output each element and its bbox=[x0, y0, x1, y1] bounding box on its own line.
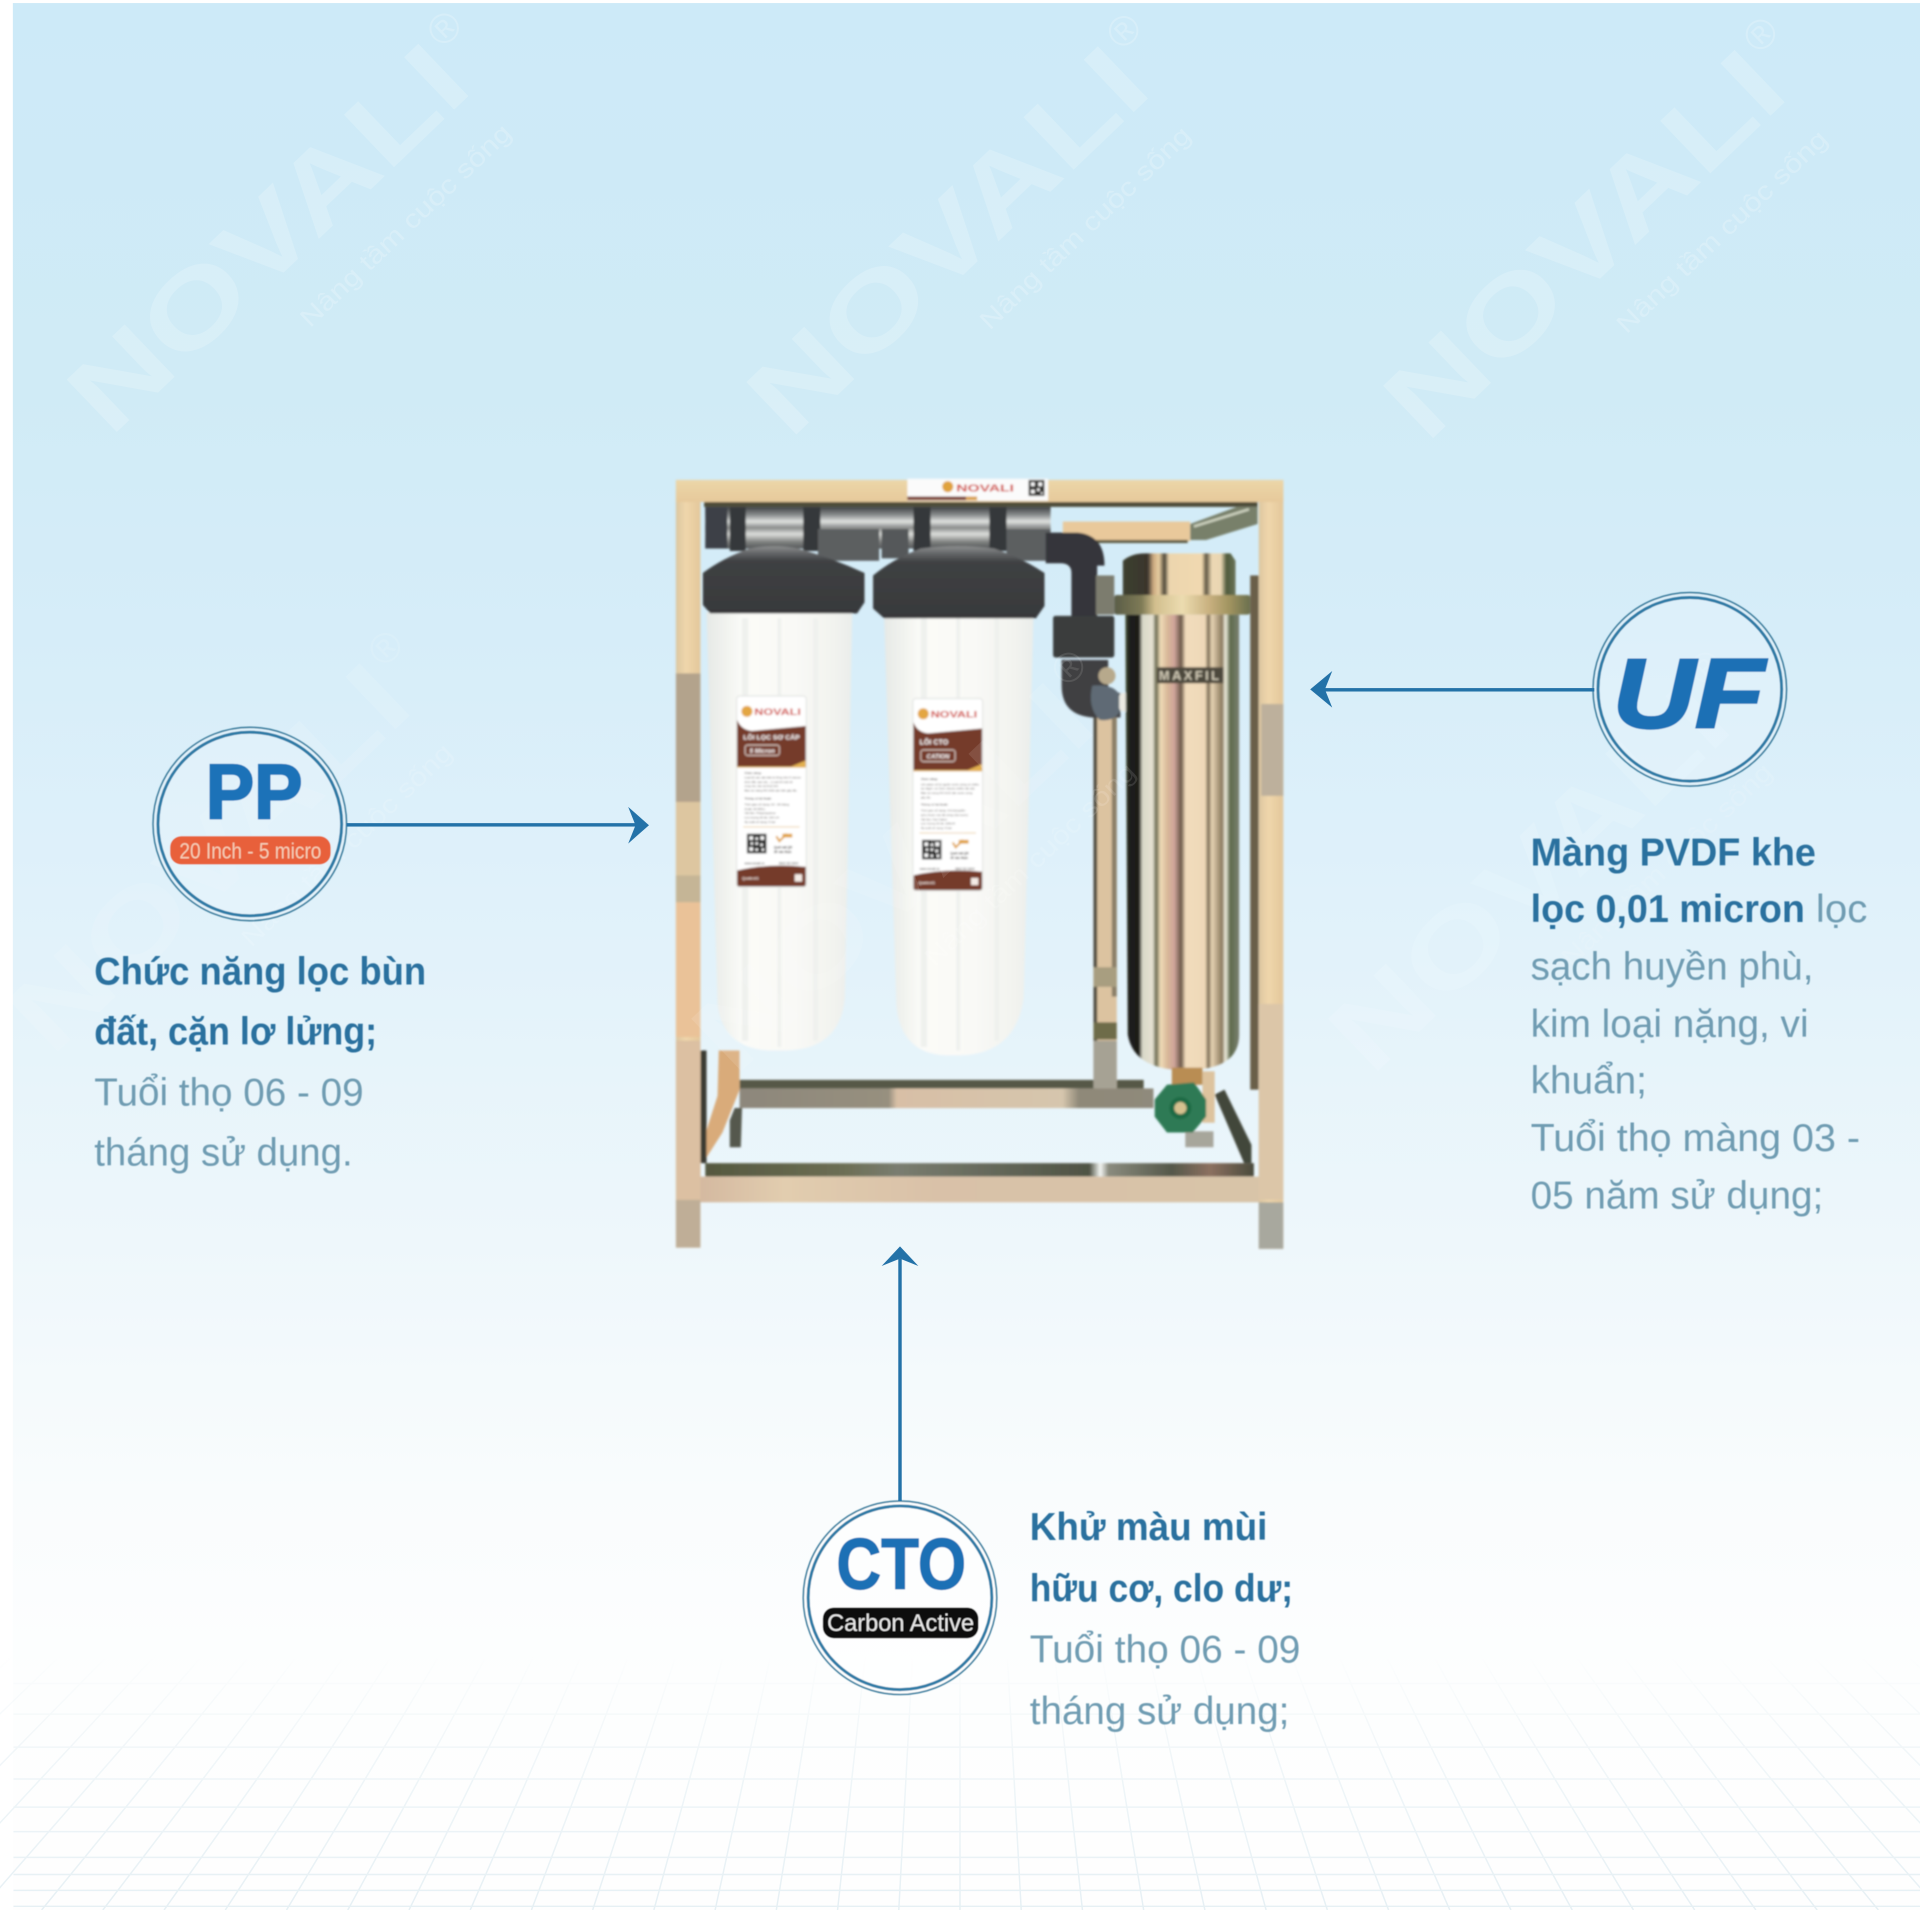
label on filter 2: Thông số kỹ thuật: bbox=[921, 803, 948, 807]
label on filter 1: Chức năng: bbox=[744, 771, 762, 775]
label on filter 2: Quét mã QR bbox=[950, 852, 969, 856]
text: UF description: Màng PVDF khe bbox=[1531, 832, 1816, 875]
icon: CTO badge: CTO bbox=[836, 1525, 966, 1605]
pipe elbow: black outlet bbox=[1046, 533, 1138, 720]
label on filter 2: để xác thực bbox=[950, 856, 968, 860]
top badge: NOVALI brand plate: NOVALI bbox=[956, 484, 1014, 495]
label on filter 2: NOVALI bbox=[931, 709, 977, 719]
text: UF description: sạch huyền phù, bbox=[1531, 945, 1813, 988]
text: UF description: lọc 0,01 micron bbox=[1531, 888, 1805, 931]
QR code bbox=[747, 834, 767, 853]
text: CTO description: Tuổi thọ 06 - 09 bbox=[1030, 1629, 1300, 1672]
label on filter 1: để xác thực bbox=[774, 850, 792, 854]
filter head manifold bbox=[705, 507, 1051, 561]
label on filter 2: gây tắc bbox=[921, 794, 931, 799]
filter cap 2 bbox=[873, 546, 1044, 618]
filter cap 1 bbox=[703, 546, 864, 613]
label on filter 1: rong rêu, tảo và thuỷ tinh. bbox=[744, 784, 779, 788]
watermark: NOVALI top left bbox=[45, 0, 546, 485]
frame: top right rails bbox=[704, 502, 1259, 1090]
text: PP description: Chức năng lọc bùn bbox=[94, 950, 426, 993]
text: UF description bbox=[1531, 832, 1867, 1217]
text: CTO description: tháng sử dụng; bbox=[1030, 1690, 1289, 1733]
label on filter 1: (hoặc 18.000L) bbox=[744, 807, 765, 811]
label on filter 1: NOVALI bbox=[754, 707, 801, 717]
label on filter 2: 0842 83 0404 bbox=[955, 867, 975, 871]
top badge: NOVALI brand plate bbox=[907, 479, 1048, 501]
icon: CTO badge: Carbon Active bbox=[827, 1610, 974, 1637]
frame: lower crossbars and braces bbox=[698, 1050, 1262, 1202]
text: CTO description bbox=[1030, 1506, 1300, 1733]
filter bowl 2 bbox=[884, 615, 1033, 1055]
label on filter 1: Áp suất sử dụng: 5 bar bbox=[744, 820, 776, 824]
callout: PP filter bbox=[94, 727, 649, 1175]
icon: PP badge: 20 Inch - 5 micro bbox=[179, 838, 321, 863]
icon: PP badge: PP bbox=[206, 749, 302, 835]
text: PP description: Tuổi thọ 06 - 09 bbox=[94, 1072, 364, 1115]
label on filter 1: Bảo vệ màng RO khỏi cặn bẩn gây tắc. bbox=[744, 788, 798, 793]
icon: UF badge: UF bbox=[1613, 638, 1767, 748]
icon: PP badge bbox=[153, 727, 347, 921]
QR code bbox=[922, 840, 942, 860]
label on filter 1: (bùn đất, sạn cát,...) Loại bỏ một số bbox=[744, 780, 793, 784]
text: PP description bbox=[94, 950, 426, 1175]
icon: UF badge bbox=[1593, 593, 1787, 786]
label on filter 2 bbox=[912, 698, 983, 891]
label on filter 1 bbox=[736, 695, 807, 888]
label on filter 2: www.novali.vn bbox=[920, 867, 940, 871]
label on filter 1: Loại bỏ các cặn bẩn lơ lửng trên 5 micron bbox=[744, 776, 801, 780]
label on filter 2: Lõi cation xử lý nguồn nước cứng có nhiều bbox=[921, 782, 979, 786]
text: UF description: 05 năm sử dụng; bbox=[1531, 1174, 1823, 1217]
label on filter 1: 0842 83 0404 bbox=[779, 861, 798, 865]
label on filter 1: Thời gian sử dụng: 03 - 06 tháng bbox=[744, 803, 789, 807]
label on filter 2: ion Mg2+ và Ca2+ (Nước nhiễm đá vôi) bbox=[921, 786, 974, 791]
stainless UF housing bbox=[1114, 553, 1250, 1070]
text: UF description: khuẩn; bbox=[1531, 1059, 1647, 1102]
label on filter 2: Vật liệu: Hạt Cation bbox=[921, 817, 947, 821]
label on filter 2: LÕI CTO bbox=[920, 737, 949, 746]
callout: CTO carbon filter bbox=[803, 1246, 1300, 1733]
arrow: UF to housing bbox=[1310, 671, 1594, 708]
text: UF description: kim loại nặng, vi bbox=[1531, 1003, 1809, 1046]
label on filter 1: 5 Micron bbox=[750, 748, 775, 755]
frame: right post bbox=[1259, 480, 1283, 1249]
frame: left post bbox=[676, 480, 700, 1248]
watermark: NOVALI top centre bbox=[725, 0, 1225, 488]
filter bowl 1 bbox=[707, 612, 852, 1050]
text: CTO description: Khử màu mùi bbox=[1030, 1506, 1267, 1549]
label on filter 1: www.novali.vn bbox=[744, 861, 765, 865]
watermark: NOVALI over the product bbox=[670, 636, 1170, 1124]
drain valve: green handwheel bbox=[1155, 1068, 1215, 1133]
label on filter 1: Quét mã QR bbox=[774, 845, 793, 849]
label on filter 2: Thời gian sử dụng: 3-6 thángđến bbox=[921, 809, 966, 813]
label on filter 1: Vật liệu: Polypropylene bbox=[744, 811, 776, 815]
text: PP description: đất, cặn lơ lửng; bbox=[94, 1010, 377, 1053]
watermark: NOVALI lower left bbox=[0, 617, 487, 1105]
watermark: NOVALI lower right bbox=[1306, 636, 1807, 1124]
label on filter 2: Áp suất sử dụng: 5 bar bbox=[921, 826, 952, 830]
arrow: PP to filter bbox=[347, 807, 649, 844]
text: UF description: lọc bbox=[1816, 888, 1867, 931]
frame: top bar bbox=[676, 480, 1283, 502]
callout: UF membrane bbox=[1310, 593, 1867, 1217]
label on filter 1: Quatest1 bbox=[742, 876, 760, 881]
text: CTO description: hữu cơ, clo dư; bbox=[1030, 1567, 1293, 1610]
product: water filter system on stainless frame bbox=[676, 479, 1283, 1249]
label on filter 1: Thông số kỹ thuật: bbox=[744, 797, 772, 801]
watermark: NOVALI top right bbox=[1362, 3, 1862, 491]
label on filter 2: Bảo vệ màng RO khỏi cặn nước cứng bbox=[921, 791, 973, 795]
icon: CTO badge bbox=[803, 1501, 997, 1695]
label on filter 1: LÕI LỌC SƠ CẤP bbox=[743, 732, 800, 742]
floor grid pattern bbox=[0, 1712, 1920, 1910]
label on filter 2: (phụ thuộc vào độ cứng của nước) bbox=[921, 813, 968, 817]
text: UF description: Tuổi thọ màng 03 - bbox=[1531, 1117, 1860, 1160]
label on filter 1: Lưu lượng tối đa: 100 L/h bbox=[744, 815, 779, 819]
label on filter 2: Quatest1 bbox=[918, 880, 936, 885]
label on filter 2: CATION bbox=[926, 753, 950, 760]
text: PP description: tháng sử dụng. bbox=[94, 1132, 353, 1175]
stainless UF housing: MAXFIL bbox=[1159, 668, 1221, 683]
arrow: CTO to filter bbox=[882, 1246, 918, 1501]
label on filter 2: Chức năng: bbox=[921, 777, 938, 781]
label on filter 2: Lưu lượng tối đa: 100L/H bbox=[921, 822, 955, 826]
frame: inner rear post bbox=[1093, 715, 1117, 1088]
